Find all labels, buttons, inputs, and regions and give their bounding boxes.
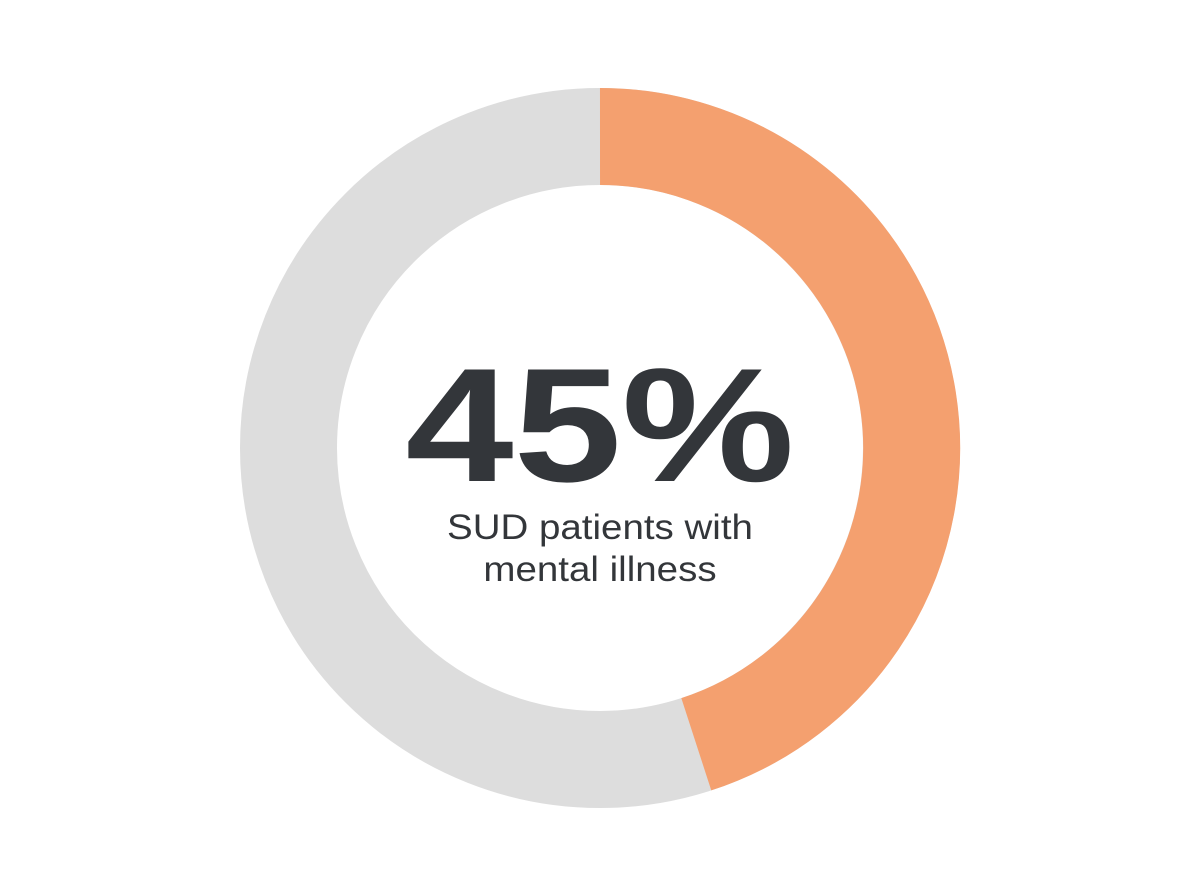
caption: SUD patients with: [447, 508, 753, 547]
donut ring: 45% share (orange): [600, 136, 912, 744]
caption: mental illness: [483, 550, 717, 589]
big number: 45%: [405, 334, 795, 515]
donut ring: remaining share (gray): [288, 136, 912, 760]
caption: [447, 508, 753, 589]
